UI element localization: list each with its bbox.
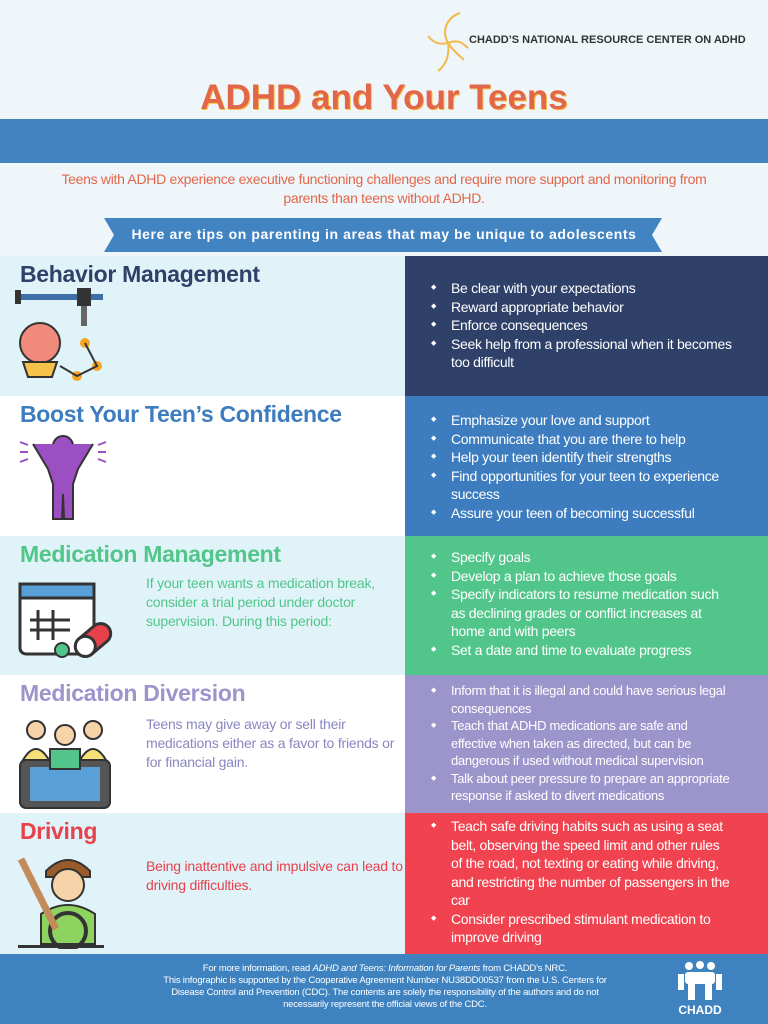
tips: diversion: Talk about peer pressure to prepare an appropriate response if asked to divert medications: [451, 770, 729, 803]
icon: brain machine: [15, 288, 103, 381]
icon: person cheering: [20, 435, 106, 520]
description: driving: Being inattentive and impulsive can lead to driving difficulties.: [146, 858, 403, 893]
heading: diversion: Medication Diversion: [20, 680, 245, 706]
icon: calendar and pill: [18, 582, 112, 658]
tips: diversion: Inform that it is illegal and could have serious legal consequences: [451, 683, 725, 716]
tips: driving: [405, 813, 768, 954]
description: diversion: Teens may give away or sell their medications either as a favor to friends or for financial gain.: [146, 716, 394, 770]
footer text: For more information, read ADHD and Teens: Information for Parents from CHADD’s NRC.: [203, 963, 567, 974]
tips: medication: Set a date and time to evaluate progress: [451, 642, 691, 658]
tips: medication: Specify goals: [451, 549, 530, 565]
title band: [0, 119, 768, 163]
banner ribbon: [104, 218, 662, 252]
intro text: Teens with ADHD experience executive functioning challenges and require more support and monitoring from parents than teens without ADHD.: [61, 171, 707, 206]
tips: driving: Consider prescribed stimulant medication to improve driving: [451, 910, 710, 945]
logo: CHADD: CHADD: [678, 1003, 722, 1017]
tips: diversion: [405, 675, 768, 813]
panel: confidence: [0, 396, 768, 536]
tips: medication: Develop a plan to achieve those goals: [451, 568, 677, 584]
tips: medication: Specify indicators to resume medication such as declining grades or conflict increases at home and with peers: [451, 586, 719, 639]
header background: [0, 0, 768, 256]
icon: teen driving: [18, 857, 104, 949]
description: medication: If your teen wants a medication break, consider a trial period under doctor supervision. During this period:: [146, 575, 375, 629]
heading: medication: Medication Management: [20, 541, 281, 567]
tips: confidence: Find opportunities for your teen to experience success: [451, 468, 719, 502]
logo: CHADD: [678, 961, 722, 1017]
tips: behavior: [405, 256, 768, 396]
tips: behavior: Be clear with your expectations: [451, 280, 635, 296]
footer: [0, 954, 768, 1024]
heading: confidence: Boost Your Teen’s Confidence: [20, 401, 342, 427]
heading: behavior: Behavior Management: [20, 261, 260, 287]
tips: driving: Teach safe driving habits such as using a seat belt, observing the speed limit and other rules of the road, not texting or eating while driving, and restricting the number of passengers in the car: [451, 818, 730, 908]
tips: confidence: Assure your teen of becoming successful: [451, 504, 695, 520]
tips: diversion: Teach that ADHD medications are safe and effective when taken as directed, but can be dangerous if used without medical supervision: [451, 718, 703, 768]
panel: medication management: [0, 536, 768, 675]
heading: driving: Driving: [20, 818, 97, 844]
banner ribbon: Here are tips on parenting in areas that may be unique to adolescents: [131, 226, 637, 242]
panel: behavior management: [0, 256, 768, 396]
tips: confidence: Communicate that you are there to help: [451, 430, 686, 446]
tips: behavior: Reward appropriate behavior: [451, 298, 623, 314]
icon: phone with friends: [19, 720, 111, 809]
title: ADHD and Your Teens: [200, 78, 568, 117]
tips: behavior: Seek help from a professional when it becomes too difficult: [451, 336, 732, 370]
tips: confidence: Emphasize your love and support: [451, 412, 650, 428]
logo: CHADD NRC: [427, 12, 746, 72]
panel: driving: [0, 813, 768, 954]
tips: confidence: [405, 396, 768, 536]
tips: behavior: Enforce consequences: [451, 317, 587, 333]
footer text: This infographic is supported by the Cooperative Agreement Number NU38DD00537 from the U.S. Centers for Disease Control and Prevention (CDC). The contents are solely the responsibility of the authors and do not necessarily represent the official views of the CDC.: [163, 975, 607, 1010]
logo: CHADD NRC: CHADD’S NATIONAL RESOURCE CENTER ON ADHD: [469, 34, 746, 46]
panel: medication diversion: [0, 675, 768, 813]
tips: medication: [405, 536, 768, 675]
tips: confidence: Help your teen identify their strengths: [451, 449, 671, 465]
